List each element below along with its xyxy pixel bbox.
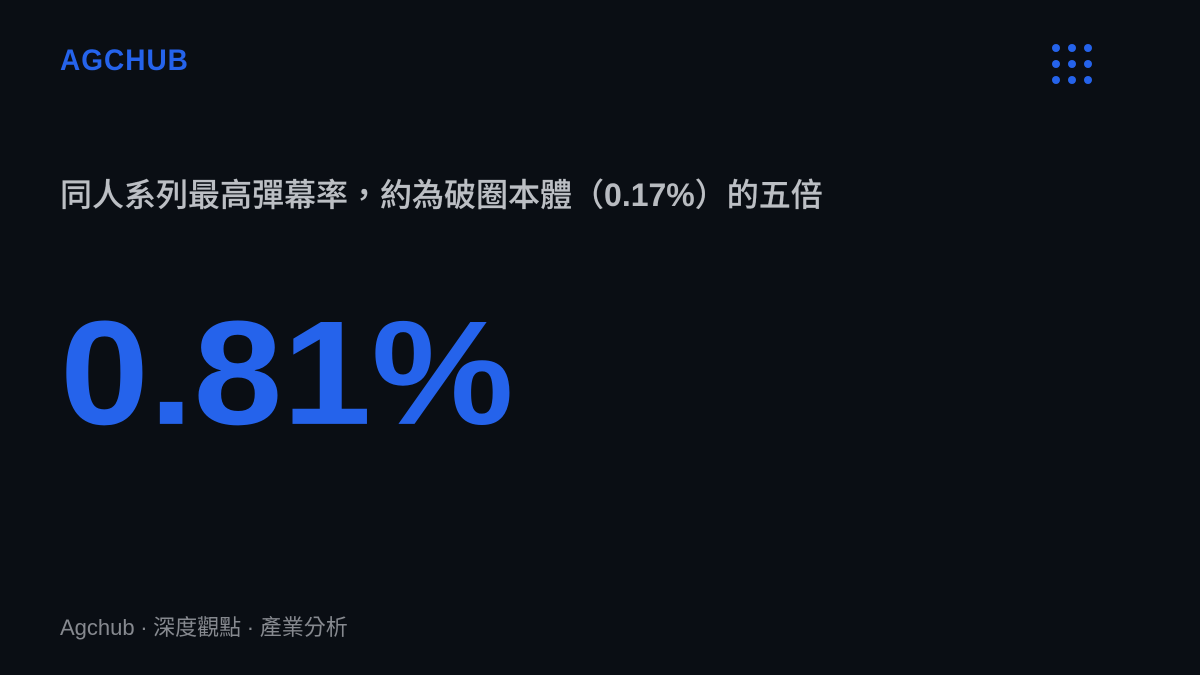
big stat number: 0.81%	[60, 290, 514, 455]
brand logo text: AGCHUB	[60, 44, 189, 76]
headline: 同人系列最高彈幕率，約為破圈本體（0.17%）的五倍	[60, 177, 823, 213]
footer text: Agchub · 深度觀點 · 產業分析	[60, 615, 348, 640]
icon: dot grid	[1052, 44, 1092, 84]
